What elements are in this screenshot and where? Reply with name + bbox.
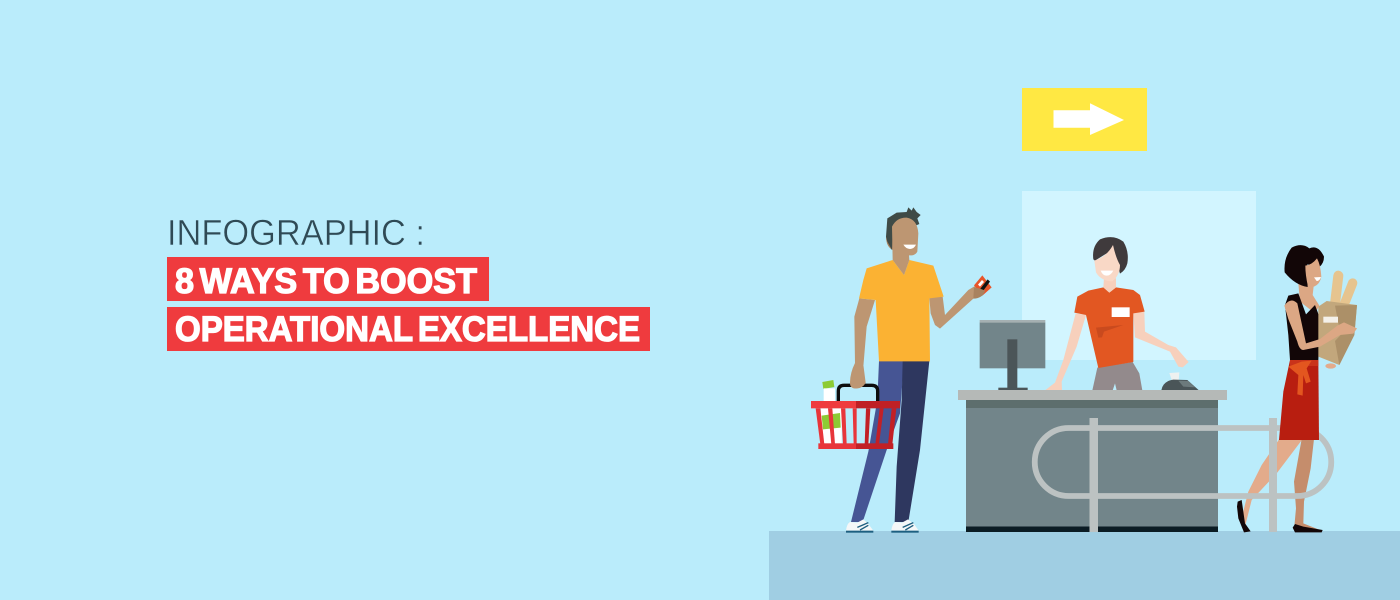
basket base xyxy=(818,443,856,449)
arm xyxy=(1284,300,1357,350)
basket rim xyxy=(811,401,856,408)
cashier left arm xyxy=(1045,313,1086,390)
headline line 1: 8 WAYS TO BOOST xyxy=(175,262,477,301)
groceries xyxy=(821,380,842,443)
credit card xyxy=(973,275,992,299)
cashier smile xyxy=(1101,271,1113,276)
cashier neck xyxy=(1103,278,1116,293)
cashier face xyxy=(1094,245,1120,281)
icon: white arrow xyxy=(1054,103,1124,135)
cashier shirt xyxy=(1074,287,1145,368)
face xyxy=(1305,258,1321,287)
skirt xyxy=(1279,360,1319,440)
card payment terminal xyxy=(1161,372,1199,390)
hair xyxy=(1284,245,1324,287)
grocery bag xyxy=(1318,301,1357,365)
right arm xyxy=(929,286,980,329)
shirt logo xyxy=(1096,325,1123,338)
cashier xyxy=(1045,237,1189,390)
cashier trousers xyxy=(1092,362,1142,390)
headline line 2: OPERATIONAL EXCELLENCE xyxy=(175,310,640,349)
ear and neck xyxy=(886,235,893,250)
light trouser leg xyxy=(851,361,904,522)
hair xyxy=(886,207,921,250)
hand under bag xyxy=(1325,363,1336,369)
computer monitor xyxy=(980,320,1045,390)
neck and face xyxy=(892,218,918,275)
eyebrow heading: INFOGRAPHIC : xyxy=(167,212,425,253)
smile xyxy=(903,245,916,249)
title block xyxy=(167,212,650,351)
shoes xyxy=(846,519,919,533)
railing barrier xyxy=(1035,418,1331,532)
woman customer xyxy=(1279,245,1357,440)
cashier hair xyxy=(1093,237,1128,274)
baguettes xyxy=(1335,276,1353,307)
shopping basket xyxy=(811,380,900,449)
yellow sign with arrow xyxy=(1022,88,1147,151)
shirt xyxy=(859,260,944,361)
name tag xyxy=(1112,307,1130,317)
floor xyxy=(769,531,1400,600)
basket handle xyxy=(838,385,878,402)
cashier right arm xyxy=(1133,312,1189,367)
man hand on basket handle xyxy=(850,363,866,389)
left slats xyxy=(816,408,857,444)
woman legs and shoes xyxy=(1237,439,1323,532)
smile xyxy=(1314,277,1321,281)
waist sash xyxy=(1288,360,1318,396)
top xyxy=(1285,293,1320,360)
right slats xyxy=(865,408,896,444)
window panel xyxy=(1022,191,1256,360)
neck xyxy=(1298,283,1319,313)
left arm xyxy=(854,298,875,367)
dark trouser leg xyxy=(895,361,929,522)
man customer xyxy=(846,207,992,533)
checkout counter xyxy=(958,390,1227,532)
